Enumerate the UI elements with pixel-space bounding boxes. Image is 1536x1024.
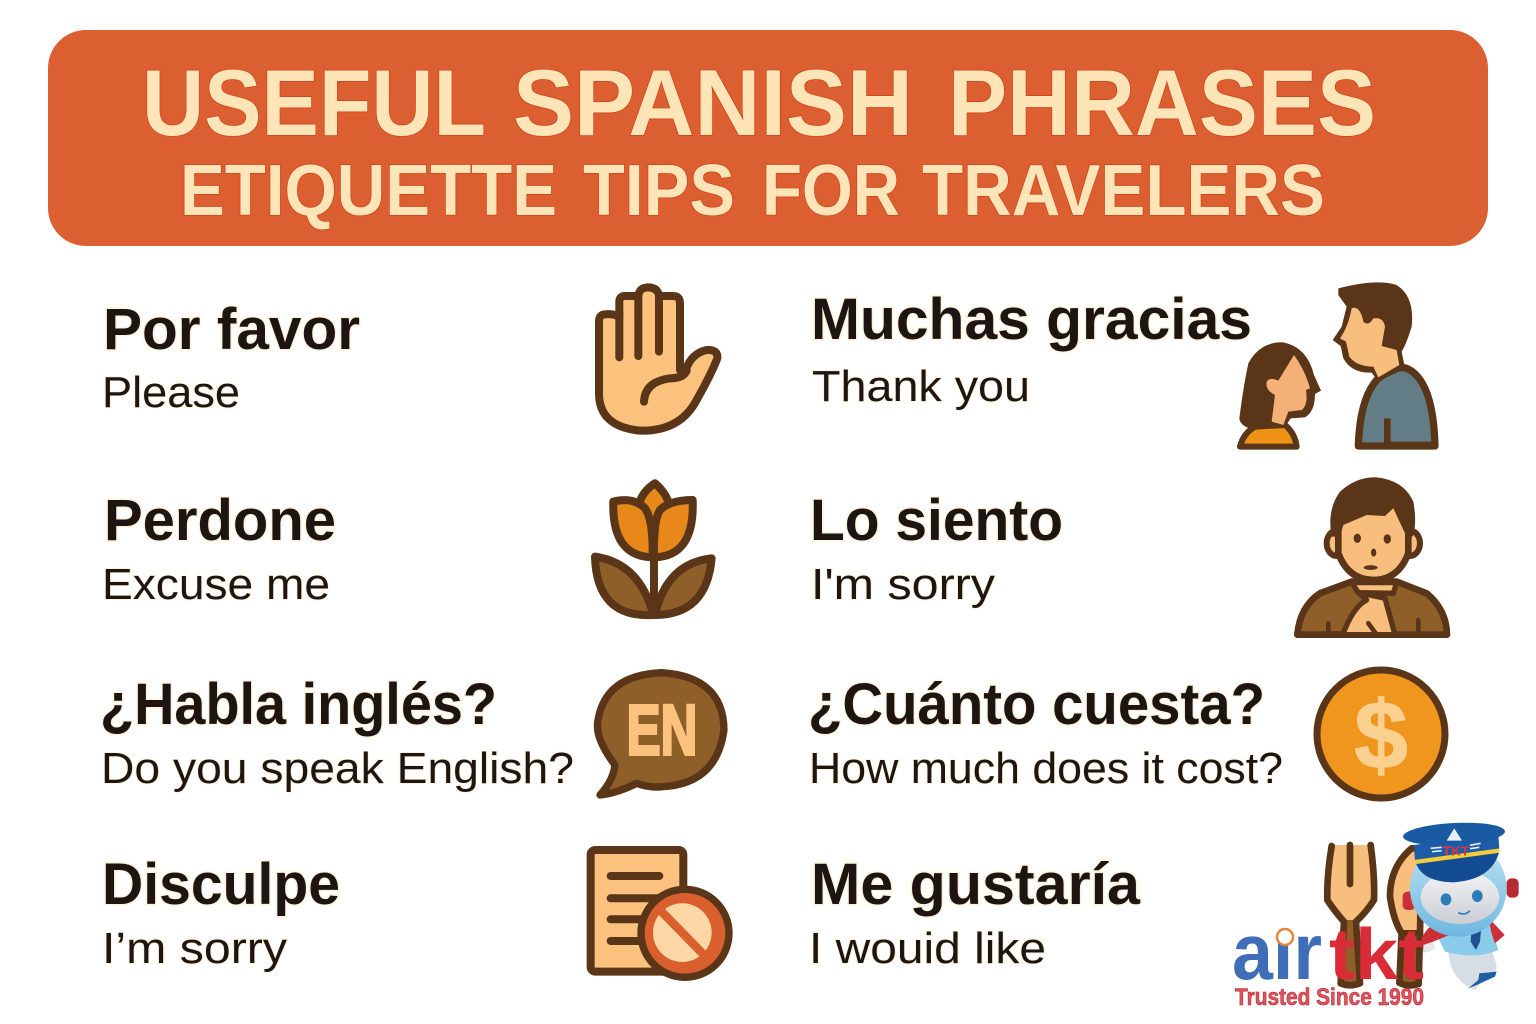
icon: EN speech bubble: EN bbox=[627, 691, 697, 771]
phrase: Por favor: Please bbox=[102, 368, 240, 417]
icon: dollar coin: $ bbox=[1354, 682, 1408, 789]
phrase: ¿Habla inglés?: ¿Habla inglés? bbox=[100, 672, 497, 737]
subtitle: TRAVELERS bbox=[922, 151, 1325, 231]
title: PHRASES bbox=[948, 50, 1376, 155]
phrase: ¿Cuánto cuesta?: ¿Cuánto cuesta? bbox=[808, 672, 1265, 737]
mascot: pilot character bbox=[1402, 820, 1519, 990]
phrase: ¿Habla inglés? bbox=[100, 672, 574, 793]
phrase: ¿Habla inglés?: Do you speak English? bbox=[101, 744, 574, 793]
phrase: Lo siento bbox=[810, 488, 1063, 609]
icon: dollar coin bbox=[1317, 670, 1445, 798]
logo: airtkt bbox=[1232, 907, 1424, 1011]
icon: two people talking bbox=[1239, 282, 1435, 447]
phrase: Muchas gracias bbox=[811, 287, 1252, 411]
icon: apologetic person bbox=[1297, 477, 1447, 635]
logo: airtkt: air bbox=[1232, 907, 1322, 996]
phrase: Por favor bbox=[102, 297, 360, 417]
subtitle: ETIQUETTE bbox=[180, 151, 557, 231]
phrase: Me gustaría: Me gustaría bbox=[811, 852, 1141, 917]
phrase: Lo siento: I'm sorry bbox=[811, 560, 995, 609]
phrase: Por favor: Por favor bbox=[103, 297, 360, 362]
phrase: Muchas gracias: Muchas gracias bbox=[811, 287, 1252, 352]
icon: tulip bbox=[595, 483, 712, 615]
title banner bbox=[48, 30, 1488, 246]
icon: raised hand bbox=[599, 287, 717, 431]
title: USEFUL bbox=[142, 50, 486, 155]
icon: document with prohibited sign bbox=[591, 850, 729, 977]
logo: airtkt: tkt bbox=[1329, 915, 1424, 995]
phrase: Perdone: Excuse me bbox=[102, 560, 330, 609]
phrase: Me gustaría bbox=[809, 852, 1141, 973]
logo tagline: Trusted Since 1990 bbox=[1235, 984, 1424, 1011]
phrase: Disculpe: I’m sorry bbox=[102, 924, 287, 973]
phrase: Perdone bbox=[102, 488, 336, 609]
phrase: Disculpe bbox=[102, 852, 340, 973]
mascot: pilot character: TKT bbox=[1443, 845, 1470, 859]
subtitle: FOR bbox=[762, 151, 900, 231]
subtitle bbox=[180, 151, 1325, 231]
phrase: Disculpe: Disculpe bbox=[102, 852, 340, 917]
phrase: Lo siento: Lo siento bbox=[810, 488, 1063, 553]
icon: fork and knife bbox=[1327, 845, 1422, 985]
phrase: Perdone: Perdone bbox=[104, 488, 336, 553]
title: SPANISH bbox=[513, 50, 913, 155]
title bbox=[142, 50, 1376, 155]
phrase: ¿Cuánto cuesta? bbox=[808, 672, 1283, 793]
phrase: Me gustaría: I wouid like bbox=[809, 924, 1046, 973]
phrase: ¿Cuánto cuesta?: How much does it cost? bbox=[809, 744, 1283, 793]
icon: EN speech bubble bbox=[597, 673, 724, 795]
phrase: Muchas gracias: Thank you bbox=[812, 362, 1030, 411]
subtitle: TIPS bbox=[583, 151, 735, 231]
